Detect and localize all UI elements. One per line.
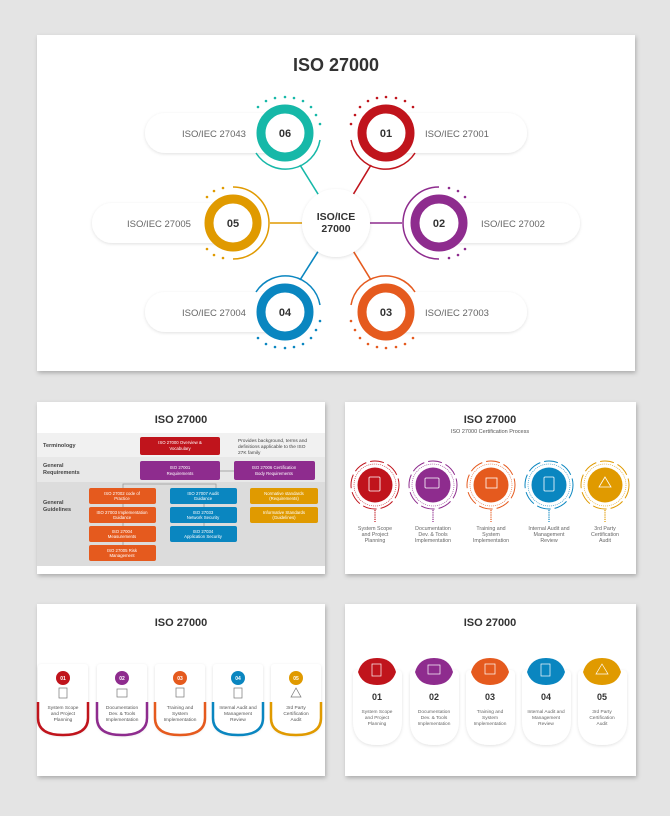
step 2: Implementation bbox=[415, 538, 451, 544]
boxes: Guidance bbox=[194, 496, 213, 501]
card 05: Certification bbox=[589, 715, 615, 721]
boxes: ISO 27000 Overview & bbox=[158, 440, 202, 445]
ring 04 bbox=[256, 276, 321, 349]
boxes: Body Requirements bbox=[255, 471, 293, 476]
slide: arch cards bbox=[37, 604, 325, 776]
card 02 bbox=[97, 664, 147, 735]
description bbox=[238, 438, 307, 456]
card 01 bbox=[38, 664, 88, 735]
slide: capped cards bbox=[345, 604, 636, 776]
boxes: ISO 27007 Audit bbox=[187, 491, 219, 496]
boxes: ISO 27001 bbox=[170, 465, 191, 470]
boxes: Guidance bbox=[113, 515, 132, 520]
card 03 bbox=[466, 658, 515, 745]
step 1: System Scope bbox=[358, 526, 392, 532]
pill labels: ISO/IEC 27043 bbox=[182, 129, 246, 140]
card 05: Audit bbox=[597, 721, 608, 727]
step 1: and Project bbox=[362, 532, 389, 538]
card 04: Internal Audit and bbox=[527, 709, 565, 715]
card 03: Training and bbox=[477, 709, 504, 715]
card 02: Documentation bbox=[106, 705, 138, 711]
card 05 bbox=[271, 664, 321, 735]
card 01: Planning bbox=[368, 721, 387, 727]
step 4: Management bbox=[534, 532, 565, 538]
step 5: Certification bbox=[591, 532, 619, 538]
card 01: System Scope bbox=[362, 709, 393, 715]
ring 02 bbox=[403, 187, 466, 259]
card 02: 02 bbox=[119, 676, 125, 682]
boxes: Informative Standards bbox=[263, 510, 305, 515]
boxes: ISO 27004 bbox=[112, 529, 133, 534]
card 04: 04 bbox=[235, 676, 241, 682]
card 05: Certification bbox=[283, 711, 309, 717]
card 01: 01 bbox=[60, 676, 66, 682]
pill labels: ISO/IEC 27001 bbox=[425, 129, 489, 140]
row labels: General bbox=[43, 463, 64, 469]
ring 02: 02 bbox=[433, 218, 445, 230]
row labels: Requirements bbox=[43, 470, 80, 476]
boxes: Measurements bbox=[108, 534, 136, 539]
pill labels bbox=[127, 129, 545, 319]
ring 03: 03 bbox=[380, 307, 392, 319]
card 04: Management bbox=[532, 715, 561, 721]
card 02: Documentation bbox=[418, 709, 450, 715]
description: definitions applicable to the ISO bbox=[238, 444, 306, 450]
ring 01 bbox=[350, 96, 415, 169]
title: ISO 27000 bbox=[293, 55, 379, 75]
card 03 bbox=[155, 664, 205, 735]
center circle bbox=[302, 189, 370, 257]
step 1 bbox=[351, 461, 399, 544]
card 04: Internal Audit and bbox=[219, 705, 257, 711]
slide: certification process circles bbox=[345, 402, 636, 574]
card 01: and Project bbox=[51, 711, 76, 717]
card 04 bbox=[522, 658, 571, 745]
bands bbox=[37, 433, 325, 457]
step 3: Implementation bbox=[473, 538, 509, 544]
step 3 bbox=[467, 461, 515, 544]
row labels bbox=[43, 443, 80, 513]
boxes: Normative standards bbox=[264, 491, 304, 496]
card 05 bbox=[578, 658, 627, 745]
card 01: and Project bbox=[365, 715, 390, 721]
card 04 bbox=[213, 664, 263, 735]
step 2: Dev. & Tools bbox=[418, 532, 448, 538]
pills bbox=[92, 113, 580, 332]
boxes: ISO 27033 bbox=[193, 510, 214, 515]
step 4: Review bbox=[540, 538, 558, 544]
card 05: 3rd Party bbox=[592, 709, 612, 715]
slide: hierarchy chart bbox=[37, 402, 325, 574]
card 03: Implementation bbox=[474, 721, 507, 727]
boxes: ISO 27002 code of bbox=[104, 491, 141, 496]
ring 05 bbox=[206, 187, 269, 259]
card 01: System Scope bbox=[48, 705, 79, 711]
card 02: Dev. & Tools bbox=[109, 711, 136, 717]
card 03: 03 bbox=[485, 692, 495, 702]
row labels: Terminology bbox=[43, 443, 77, 449]
card 04: Review bbox=[538, 721, 554, 727]
boxes: ISO 27034 bbox=[193, 529, 214, 534]
row labels: General bbox=[43, 500, 64, 506]
card 03: Implementation bbox=[164, 717, 197, 723]
card 02: Implementation bbox=[418, 721, 451, 727]
description: 27K family bbox=[238, 450, 261, 456]
card 04: 04 bbox=[541, 692, 551, 702]
boxes: ISO 27003 Implementation bbox=[96, 510, 148, 515]
center circle: 27000 bbox=[321, 223, 351, 235]
boxes: (Requirements) bbox=[269, 496, 299, 501]
card 05: 05 bbox=[597, 692, 607, 702]
boxes: ISO 27006 Certification bbox=[252, 465, 297, 470]
ring 01: 01 bbox=[380, 128, 392, 140]
boxes: (Guidelines) bbox=[272, 515, 296, 520]
step 5: 3rd Party bbox=[594, 526, 616, 532]
card 02: Implementation bbox=[106, 717, 139, 723]
step 3: System bbox=[482, 532, 500, 538]
step 4: Internal Audit and bbox=[528, 526, 570, 532]
card 02 bbox=[410, 658, 459, 745]
card 05: 3rd Party bbox=[286, 705, 306, 711]
card 02: Dev. & Tools bbox=[421, 715, 448, 721]
boxes: Requirements bbox=[167, 471, 193, 476]
ring 04: 04 bbox=[279, 307, 292, 319]
pill labels: ISO/IEC 27005 bbox=[127, 219, 191, 230]
card 03: Training and bbox=[167, 705, 194, 711]
boxes bbox=[89, 437, 318, 561]
card 02: 02 bbox=[429, 692, 439, 702]
row labels: Guidelines bbox=[43, 507, 71, 513]
step 5: Audit bbox=[599, 538, 612, 544]
card 05: Audit bbox=[291, 717, 302, 723]
step 3: Training and bbox=[476, 526, 506, 532]
card 03: System bbox=[172, 711, 188, 717]
pill labels: ISO/IEC 27002 bbox=[481, 219, 545, 230]
ring 05: 05 bbox=[227, 218, 239, 230]
boxes: Vocabulary bbox=[169, 446, 191, 451]
card 01: 01 bbox=[372, 692, 382, 702]
step 2: Documentation bbox=[415, 526, 451, 532]
title: ISO 27000 bbox=[464, 414, 516, 426]
card 05: 05 bbox=[293, 676, 299, 682]
title: ISO 27000 bbox=[155, 617, 207, 629]
pill labels: ISO/IEC 27004 bbox=[182, 308, 246, 319]
card 03: System bbox=[482, 715, 498, 721]
boxes: Network Security bbox=[187, 515, 220, 520]
pill labels: ISO/IEC 27003 bbox=[425, 308, 489, 319]
card 01: Planning bbox=[54, 717, 73, 723]
title: ISO 27000 bbox=[155, 414, 207, 426]
boxes: Application Security bbox=[184, 534, 223, 539]
center circle: ISO/ICE bbox=[317, 211, 355, 223]
card 04: Review bbox=[230, 717, 246, 723]
connectors bbox=[270, 165, 402, 280]
step 1: Planning bbox=[365, 538, 385, 544]
boxes: Management bbox=[109, 553, 135, 558]
boxes: ISO 27005 Risk bbox=[107, 548, 138, 553]
step 2 bbox=[409, 461, 457, 544]
slide: main hexagon diagram bbox=[37, 35, 635, 371]
card 01 bbox=[353, 658, 402, 745]
step 4 bbox=[525, 461, 573, 544]
ring 06: 06 bbox=[279, 128, 291, 140]
card 04: Management bbox=[224, 711, 253, 717]
step 5 bbox=[581, 461, 629, 544]
boxes: Practice bbox=[114, 496, 130, 501]
ring 03 bbox=[350, 276, 415, 349]
subtitle: ISO 27000 Certification Process bbox=[451, 429, 529, 435]
description: Provides background, terms and bbox=[238, 438, 307, 444]
connectors bbox=[123, 471, 234, 553]
card 03: 03 bbox=[177, 676, 183, 682]
title: ISO 27000 bbox=[464, 617, 516, 629]
ring 06 bbox=[256, 96, 321, 169]
